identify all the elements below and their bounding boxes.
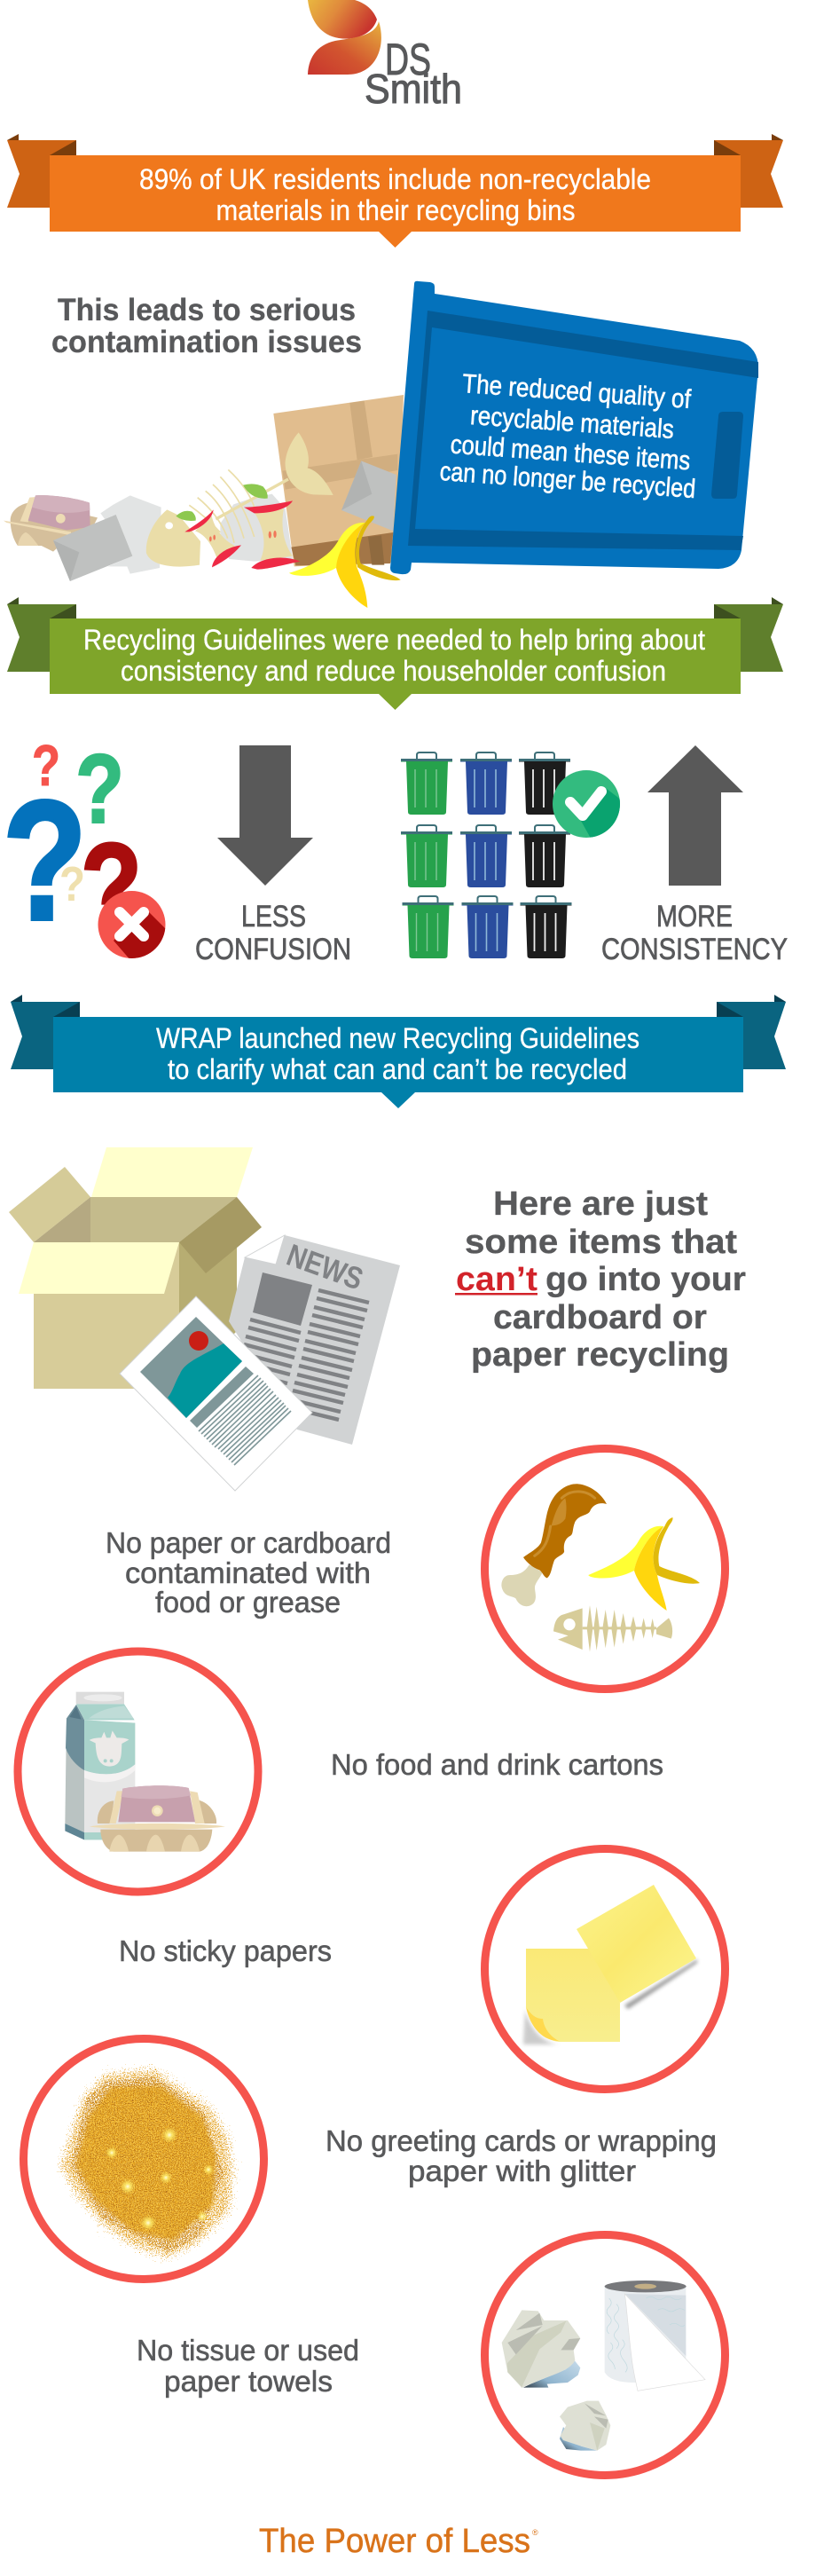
heading: contamination issues: contamination issues (51, 325, 362, 359)
text: cartons: No food and drink cartons (331, 1748, 663, 1781)
label: less confusion: CONFUSION (195, 933, 351, 966)
gold glitter (62, 2070, 232, 2257)
tissue illustrations (502, 2281, 705, 2451)
grey envelope (53, 515, 132, 581)
icon: green tick badge (553, 770, 620, 838)
banner: recycling guidelines needed: Recycling Guidelines were needed to help bring about (83, 624, 705, 656)
question marks: ? (75, 735, 124, 844)
recycling bin grid (401, 752, 571, 958)
paper towel roll (605, 2281, 705, 2391)
icon: red cross badge (98, 891, 165, 958)
egg carton (4, 495, 98, 552)
tagline: The Power of Less: ® (532, 2528, 538, 2537)
text: greeting cards: No greeting cards or wrapping (326, 2124, 717, 2157)
question marks (3, 733, 142, 956)
label: more consistency (601, 900, 788, 966)
text: tissue (137, 2334, 359, 2398)
arrow: up (647, 745, 743, 886)
bin message: can no longer be recycled (439, 457, 696, 504)
heading: items that can't go: can’t (456, 1261, 537, 1298)
text: sticky papers: No sticky papers (119, 1934, 332, 1967)
banner: 89% of UK residents: 89% of UK residents include non-recyclable (139, 163, 651, 195)
wheelie bin on its side (390, 281, 758, 574)
banana peel (289, 516, 401, 608)
banner: WRAP launched guidelines: to clarify what can and can’t be recycled (168, 1053, 627, 1085)
logo: DS Smith: Smith (365, 66, 462, 112)
label: more consistency: CONSISTENCY (601, 933, 788, 966)
logo: DS Smith: DS (385, 35, 431, 84)
label: more consistency: MORE (656, 900, 733, 934)
banner: 89% of UK residents (7, 134, 783, 248)
bin message (439, 369, 696, 504)
arrow: down (217, 745, 313, 886)
logo: DS Smith (308, 0, 462, 112)
banner: recycling guidelines needed: consistency and reduce householder confusion (121, 655, 666, 687)
envelope (341, 461, 396, 531)
heading: items that can't go: paper recycling (471, 1336, 729, 1374)
text: greeting cards (326, 2124, 717, 2187)
circle: sticky notes (484, 1849, 726, 2089)
heading: items that can't go: go into your (545, 1261, 746, 1298)
row two bins (401, 825, 570, 887)
text: contaminated paper (106, 1526, 391, 1619)
heading: items that can't go: Here are just (493, 1186, 708, 1223)
crumpled paper two (220, 494, 293, 562)
text: tissue: paper towels (164, 2365, 333, 2398)
circle: glitter (23, 2039, 264, 2279)
text: contaminated paper: food or grease (155, 1586, 341, 1619)
crumpled paper (100, 495, 161, 574)
small crumpled tissue (560, 2401, 610, 2451)
cardboard box (273, 395, 404, 566)
heading: contamination issues (51, 293, 362, 359)
label: less confusion: LESS (241, 900, 306, 934)
question marks: ? (32, 733, 60, 798)
tagline: The Power of Less: The Power of Less (259, 2523, 530, 2560)
text: contaminated paper: contaminated with (125, 1556, 371, 1589)
text: tissue: No tissue or used (137, 2334, 359, 2367)
row one bins (401, 752, 570, 815)
circle: cartons (18, 1651, 258, 1892)
banner: recycling guidelines needed (7, 597, 783, 710)
fish bone (189, 432, 333, 543)
illustration: waste spilling from bin (4, 395, 404, 581)
drumstick, banana peel and fish bones (501, 1484, 700, 1652)
circle: food waste (484, 1448, 726, 1690)
milk carton (65, 1692, 135, 1839)
illustration: newspaper: NEWS (282, 1238, 367, 1297)
bin message: recyclable materials (469, 401, 675, 445)
illustration: newspaper (229, 1235, 400, 1445)
heading: contamination issues: This leads to serious (58, 293, 356, 327)
sticky notes (523, 1885, 697, 2044)
bin message: could mean these items (450, 430, 691, 476)
banner: WRAP launched guidelines (11, 995, 786, 1108)
circle: tissue and towels (484, 2234, 726, 2476)
label: less confusion (195, 900, 351, 966)
apple core right (243, 484, 300, 570)
heading: items that can't go: some items that (465, 1224, 737, 1261)
banner: WRAP launched guidelines: WRAP launched new Recycling Guidelines (156, 1022, 639, 1054)
banner: 89% of UK residents: materials in their recycling bins (216, 194, 575, 226)
large crumpled tissue (502, 2310, 580, 2388)
milk carton and egg box (65, 1692, 225, 1852)
heading: items that can't go: cardboard or (493, 1299, 707, 1336)
question marks: ? (3, 765, 87, 956)
question marks: ? (59, 856, 85, 911)
egg box (90, 1785, 225, 1852)
text: contaminated paper: No paper or cardboard (106, 1526, 391, 1559)
row three bins (403, 896, 571, 958)
bitten apple (146, 509, 200, 567)
text: greeting cards: paper with glitter (408, 2155, 636, 2187)
bin message: The reduced quality of (461, 369, 692, 414)
illustration: magazine page (120, 1296, 312, 1491)
heading: items that can't go (455, 1186, 746, 1374)
illustration: open cardboard box (9, 1147, 262, 1389)
question marks: ? (81, 818, 142, 956)
apple core left (176, 509, 241, 567)
